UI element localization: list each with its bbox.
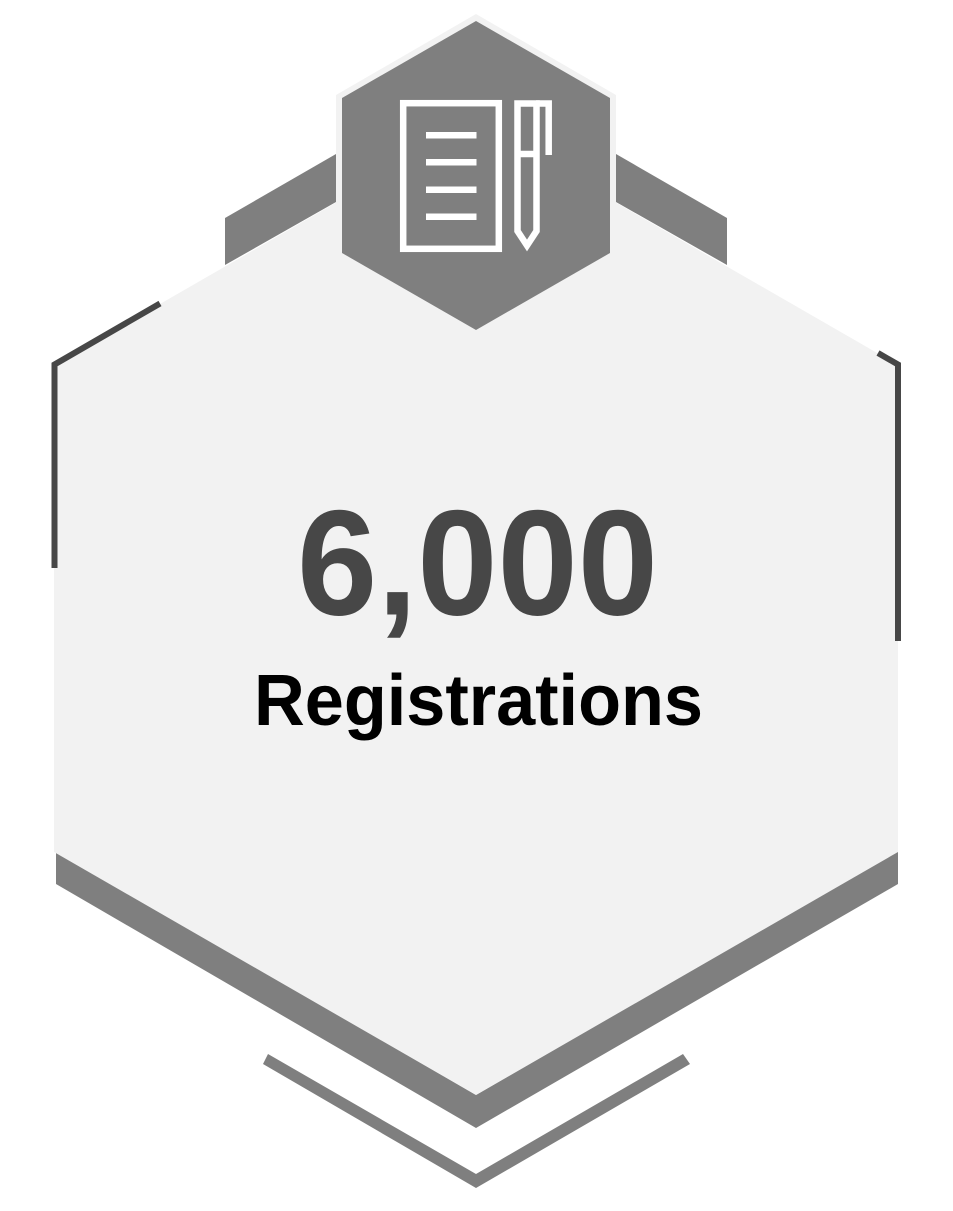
lower shadow of the main hexagon	[56, 850, 898, 1128]
dark corner bracket: left	[54, 304, 160, 568]
badge grey fill	[342, 21, 610, 330]
icon: notepad and pen	[403, 103, 549, 249]
icon: pen	[518, 104, 549, 246]
dark corner bracket: right	[878, 353, 898, 641]
upper shadow wings behind the main hexagon	[225, 154, 727, 265]
main light hexagon panel	[54, 122, 898, 1095]
figure: 6,000: 6,000	[297, 478, 658, 646]
top icon hexagon badge	[336, 14, 616, 337]
bottom chevron	[263, 1054, 690, 1188]
badge light outline	[336, 14, 616, 337]
icon: notepad	[403, 103, 499, 249]
label: Registrations: Registrations	[254, 661, 703, 741]
